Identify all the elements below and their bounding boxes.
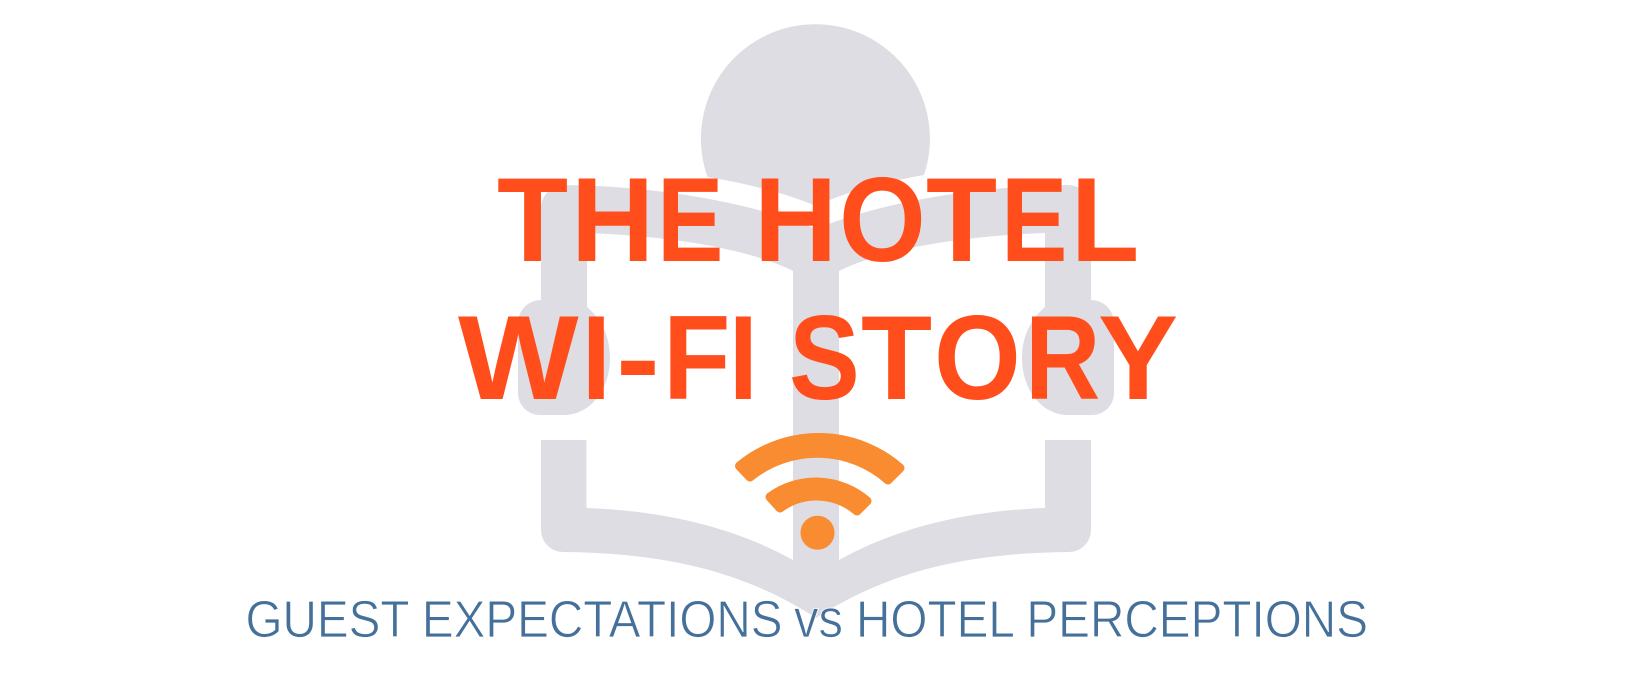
icon: open book bbox=[541, 185, 1091, 618]
title line 1: T bbox=[497, 153, 568, 287]
wi-fi middle arc bbox=[770, 482, 867, 511]
title line 2: S bbox=[789, 291, 859, 425]
icon: person reading a book (background) bbox=[518, 24, 1114, 618]
icon: right hand bbox=[1022, 300, 1114, 415]
title line 2: O bbox=[934, 291, 1021, 425]
title line 2 bbox=[458, 291, 1178, 425]
title line 1: E bbox=[657, 153, 723, 287]
title line 1: L bbox=[1071, 153, 1139, 287]
title line 2: Y bbox=[1098, 291, 1178, 425]
title line 1: O bbox=[839, 153, 926, 287]
icon: wi-fi signal bbox=[740, 438, 900, 545]
wi-fi dot bbox=[805, 520, 830, 545]
icon: left hand bbox=[518, 300, 610, 415]
subtitle bbox=[246, 589, 1368, 649]
subtitle: hotel perceptions: HOTEL PERCEPTIONS bbox=[856, 591, 1368, 649]
title line 1: E bbox=[1001, 153, 1067, 287]
title line 2: T bbox=[861, 291, 932, 425]
title line 1: H bbox=[571, 153, 654, 287]
title line 2: - bbox=[616, 291, 659, 425]
subtitle: vs: vs bbox=[794, 589, 843, 649]
title line 2: F bbox=[663, 291, 730, 425]
title line 1: T bbox=[926, 153, 997, 287]
title line 2: W bbox=[458, 291, 579, 425]
wi-fi outer arc bbox=[740, 438, 900, 480]
icon: head bbox=[701, 24, 930, 206]
title line 1 bbox=[497, 153, 1139, 287]
title line 1: H bbox=[754, 153, 837, 287]
title line 2: R bbox=[1025, 291, 1100, 425]
title line 2: I bbox=[582, 291, 610, 425]
subtitle: guest expectations: GUEST EXPECTATIONS bbox=[246, 591, 782, 649]
title line 2: I bbox=[729, 291, 758, 425]
